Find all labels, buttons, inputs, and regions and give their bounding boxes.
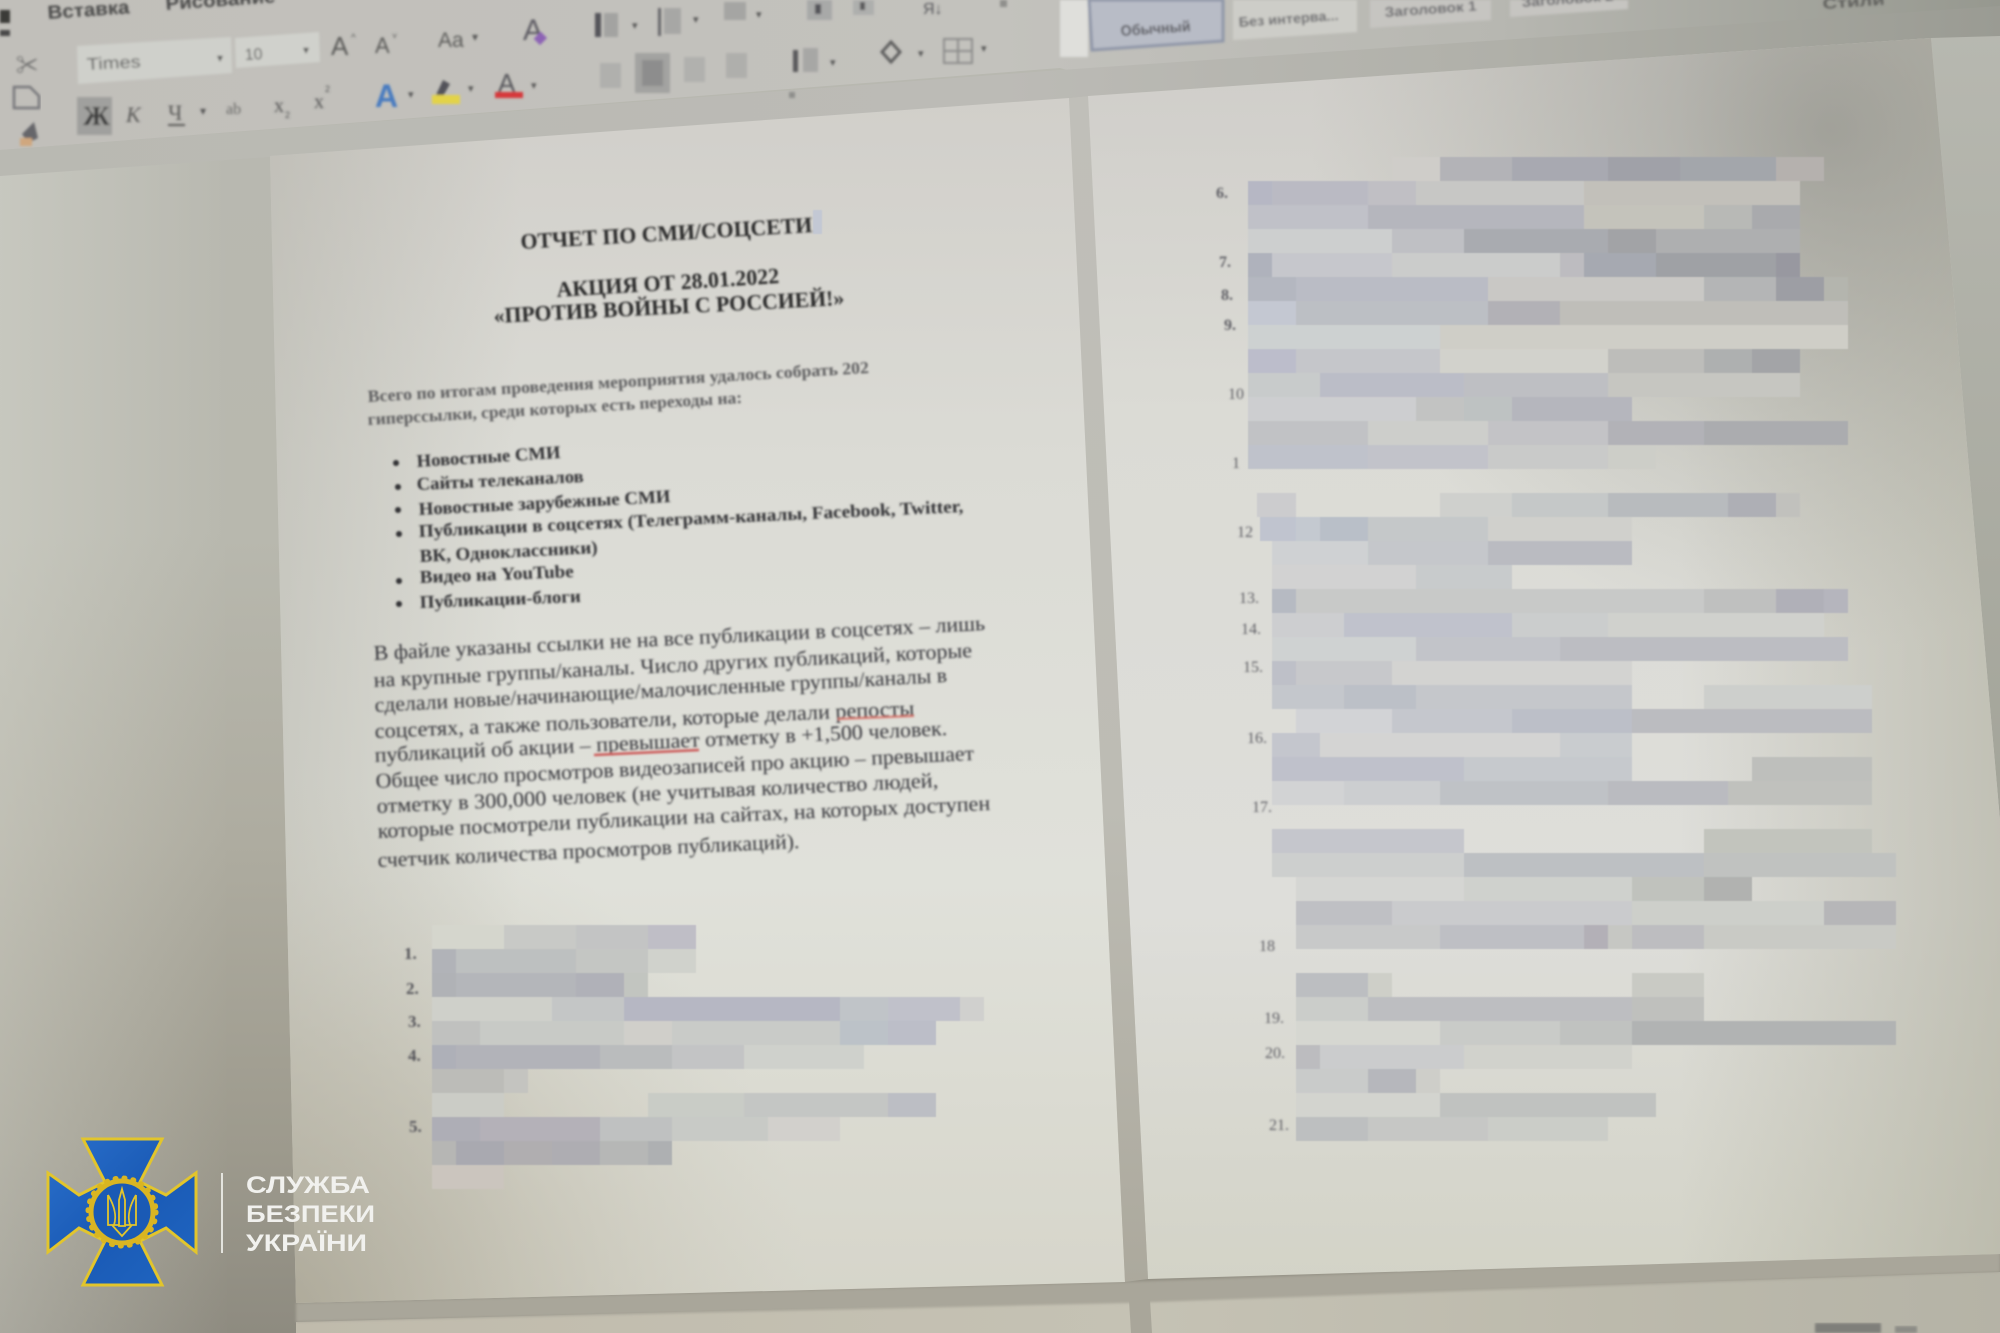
panel: ribbon toolbar (0, 0, 2000, 176)
bullet list: Публикации в соцсетях (Телеграмм-каналы, Facebook, Twitter, (418, 496, 964, 542)
panel: lower pages strip (296, 1250, 2000, 1333)
ribbon controls: style gallery (1060, 0, 1885, 57)
ribbon controls: font group: A (523, 14, 543, 47)
bullet list: Новостные зарубежные СМИ (418, 486, 671, 519)
list numbers 6-21: 21. (1269, 1117, 1289, 1134)
body paragraph: публикаций об акции – превышает отметку в +1,500 человек. (374, 716, 948, 767)
list numbers 6-21: 10 (1228, 386, 1244, 403)
ribbon controls: font group: A (375, 33, 390, 58)
list numbers 6-21: 20. (1265, 1045, 1285, 1062)
body paragraph: счетчик количества просмотров публикаций). (377, 829, 800, 872)
body paragraph: которые посмотрели публикации на сайтах, на которых доступен (377, 791, 991, 843)
ribbon controls: paragraph group: ▾ (756, 9, 762, 21)
ribbon controls: font group: Ч (168, 100, 182, 125)
list numbers 1-5: 4. (408, 1046, 421, 1065)
list numbers 6-21: 16. (1247, 730, 1267, 747)
list numbers 6-21: 9. (1224, 317, 1236, 334)
logo text: Служба безпеки України: УКРАЇНИ (246, 1230, 367, 1257)
report title: «ПРОТИВ ВОЙНЫ С РОССИЕЙ!» (493, 285, 845, 328)
body paragraph: сделали новые/начинающие/малочисленные группы/каналы в (374, 663, 948, 717)
ribbon controls: font group: ^ (351, 33, 356, 44)
list numbers 1-5: 1. (404, 944, 417, 963)
list numbers 6-21: 8. (1221, 287, 1233, 304)
pixelated redacted links, right page (1248, 157, 1896, 1141)
ribbon controls: clipboard icons: ✂ (16, 53, 38, 78)
list numbers 6-21: 17. (1252, 799, 1272, 816)
logo text: Служба безпеки України: БЕЗПЕКИ (246, 1201, 375, 1228)
bullet list: Видео на YouTube (419, 561, 574, 587)
ribbon controls: font group: ▾ (303, 43, 309, 57)
report title: АКЦИЯ ОТ 28.01.2022 (556, 263, 780, 302)
ribbon controls: font group: 2 (325, 84, 330, 94)
ribbon controls: font group (77, 14, 547, 135)
list numbers 6-21: 12 (1237, 524, 1253, 541)
list numbers 6-21: 18 (1259, 938, 1275, 955)
report title (493, 212, 845, 328)
ribbon controls: font group: ▾ (472, 30, 478, 44)
body paragraph: Общее число просмотров видеозаписей про акцию – превышает (375, 741, 975, 793)
list numbers 6-21: 6. (1216, 185, 1228, 202)
cursor selection highlight (813, 210, 822, 234)
list numbers 1-5 (404, 944, 422, 1136)
list numbers 6-21: 14. (1241, 621, 1261, 638)
report title: ОТЧЕТ ПО СМИ/СОЦСЕТИ (520, 212, 813, 254)
list numbers 6-21 (1216, 185, 1289, 1134)
body paragraph: на крупные группы/каналы. Число других публикаций, которые (373, 638, 972, 692)
logo text: Служба безпеки України (246, 1172, 375, 1257)
ribbon controls: font group: ▾ (468, 83, 474, 95)
ribbon controls: style gallery: Без интерва... (1238, 7, 1339, 30)
ribbon controls: font group: ab (226, 101, 241, 118)
ribbon controls: font group: ˅ (392, 31, 397, 41)
ribbon controls: font group: x (314, 91, 324, 113)
panel: left document page (270, 98, 1125, 1303)
ribbon controls: font group: ▾ (217, 51, 223, 65)
bullet list: Новостные СМИ (416, 442, 561, 471)
ribbon controls: paragraph group: ▾ (632, 20, 638, 32)
list numbers 6-21: 13. (1239, 590, 1259, 607)
bullet list: ВК, Одноклассники) (419, 537, 598, 567)
ribbon controls: font group: A (498, 68, 516, 98)
body paragraph: В файле указаны ссылки не на все публикации в соцсетях – лишь (373, 611, 986, 665)
ribbon controls: font group: ▾ (408, 89, 414, 101)
ribbon controls: paragraph group: ▾ (693, 14, 699, 26)
ribbon controls: font group: К (125, 102, 142, 127)
bullet list (393, 442, 964, 612)
list numbers 1-5: 3. (408, 1012, 421, 1031)
ribbon controls: font group: Ж (83, 101, 110, 131)
intro paragraph: Всего по итогам проведения мероприятия удалось собрать 202 (367, 358, 869, 406)
ribbon controls: paragraph group: Я↓ (923, 1, 943, 18)
icon: trident (108, 1189, 136, 1236)
ribbon controls: paragraph group: ▾ (830, 57, 836, 69)
ribbon controls: font group: A (375, 78, 398, 114)
ribbon controls: paragraph group: ▾ (981, 43, 987, 55)
list numbers 6-21: 7. (1219, 254, 1231, 271)
list numbers 1-5: 5. (409, 1117, 422, 1136)
list numbers 6-21: 15. (1243, 659, 1263, 676)
pixelated redacted links, left page (432, 925, 984, 1189)
body paragraph (373, 611, 991, 872)
ribbon controls: font group: A (331, 31, 349, 61)
list numbers 6-21: 19. (1264, 1010, 1284, 1027)
list numbers 1-5: 2. (406, 979, 419, 998)
ribbon controls: font group: 2 (285, 110, 290, 120)
panel: right document page (1088, 38, 2000, 1279)
ribbon controls: font group: 10 (244, 46, 263, 64)
ribbon controls: clipboard icons (0, 10, 39, 146)
bullet list: Сайты телеканалов (416, 466, 584, 494)
ribbon controls: paragraph group (595, 0, 1007, 98)
ribbon controls: font group: ▾ (531, 80, 537, 92)
ribbon controls: font group: ▾ (200, 104, 206, 118)
ribbon controls: font group: Times (86, 52, 141, 74)
intro paragraph (367, 358, 869, 429)
body paragraph: соцсетях, а также пользователи, которые делали репосты (374, 696, 915, 743)
logo divider (221, 1173, 223, 1253)
logo: SBU emblem (48, 1139, 196, 1285)
ribbon controls: paragraph group: ▾ (918, 48, 924, 60)
logo text: Служба безпеки України: СЛУЖБА (246, 1172, 370, 1199)
body paragraph: отметку в 300,000 человек (не учитывая количество людей, (376, 768, 939, 818)
intro paragraph: гиперссылки, среди которых есть переходы на: (367, 388, 743, 429)
bullet list: Публикации-блоги (419, 586, 581, 612)
ribbon text: tabs (47, 0, 276, 24)
ribbon controls: font group: Aa (438, 29, 464, 52)
list numbers 6-21: 1 (1232, 455, 1240, 472)
ribbon controls: style gallery: Обычный (1120, 18, 1191, 40)
ribbon controls: font group: x (274, 95, 284, 117)
